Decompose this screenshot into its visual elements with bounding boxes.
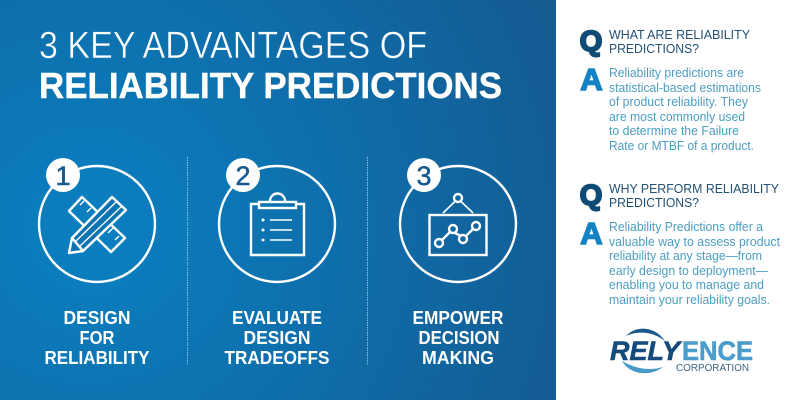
answer text: statistical-based estimations <box>609 81 761 95</box>
logo: Relyence Corporation: ENCE <box>682 336 753 366</box>
icon: A letter: A <box>580 216 603 251</box>
label: design for reliability: FOR <box>80 327 114 348</box>
panel: second question and answer <box>580 180 781 307</box>
logo tagline: CORPORATION <box>676 362 749 374</box>
logo top arc <box>626 329 665 341</box>
logo bottom arc <box>622 361 663 373</box>
icon: Q letter: Q <box>580 26 602 58</box>
answer text <box>609 66 761 153</box>
answer text: reliability at any stage—from <box>609 249 762 263</box>
panel: first question and answer <box>580 26 761 153</box>
answer text: of product reliability. They <box>609 95 749 109</box>
panel: white Q and A sidebar background <box>556 0 800 400</box>
answer text: early design to deployment— <box>609 264 768 278</box>
icon circle 3 <box>400 166 516 282</box>
number badge 2 <box>226 158 260 192</box>
heading: why perform reliability predictions <box>609 182 780 210</box>
logo: Relyence Corporation <box>610 329 753 374</box>
logo wordmark: RELY <box>610 336 683 366</box>
label: empower decision making: DECISION <box>418 327 500 348</box>
number badge 1: 1 <box>55 161 71 191</box>
label: design for reliability: RELIABILITY <box>44 347 150 368</box>
number badge 2: 2 <box>235 161 251 191</box>
label: evaluate design tradeoffs: EVALUATE <box>232 307 322 328</box>
answer text: maintain your reliability goals. <box>609 293 770 307</box>
number badge 3: 3 <box>416 161 432 191</box>
icon: A letter: A <box>580 62 603 97</box>
icon circle 2 <box>219 166 335 282</box>
answer text: valuable way to assess product <box>609 235 781 249</box>
label: evaluate design tradeoffs: DESIGN <box>244 327 310 348</box>
heading: why perform reliability predictions: WHY PERFORM RELIABILITY <box>609 182 780 196</box>
title <box>39 25 502 106</box>
label: design for reliability: DESIGN <box>64 307 130 328</box>
icon: Q letter: Q <box>580 180 602 212</box>
icon: ruler and pencil <box>69 197 126 253</box>
answer text: Reliability Predictions offer a <box>609 220 763 234</box>
number badge 1 <box>46 158 80 192</box>
heading: what are reliability predictions: PREDICTIONS? <box>609 42 699 56</box>
label: evaluate design tradeoffs <box>224 307 330 368</box>
icon: clipboard checklist <box>251 194 304 255</box>
label: empower decision making: MAKING <box>422 347 494 368</box>
heading: what are reliability predictions <box>609 28 751 56</box>
panel: advantage 3 <box>400 158 516 368</box>
panel: blue background <box>0 0 556 400</box>
heading: what are reliability predictions: WHAT ARE RELIABILITY <box>609 28 751 42</box>
label: empower decision making: EMPOWER <box>412 307 504 328</box>
answer text <box>609 220 781 307</box>
panel: advantage 1 <box>39 158 155 368</box>
number badge 3 <box>407 158 441 192</box>
label: design for reliability <box>44 307 150 368</box>
answer text: enabling you to manage and <box>609 278 764 292</box>
panel: advantage 2 <box>219 158 335 368</box>
title line 1: 3 KEY ADVANTAGES OF <box>39 25 427 67</box>
heading: why perform reliability predictions: PREDICTIONS? <box>609 196 699 210</box>
answer text: to determine the Failure <box>609 124 739 138</box>
label: evaluate design tradeoffs: TRADEOFFS <box>224 347 330 368</box>
icon: hanging board with line chart <box>430 194 486 255</box>
icon circle 1 <box>39 166 155 282</box>
answer text: Reliability predictions are <box>609 66 744 80</box>
answer text: Rate or MTBF of a product. <box>609 139 754 153</box>
title line 2: RELIABILITY PREDICTIONS <box>39 65 502 106</box>
label: empower decision making <box>412 307 504 368</box>
answer text: are most commonly used <box>609 110 745 124</box>
